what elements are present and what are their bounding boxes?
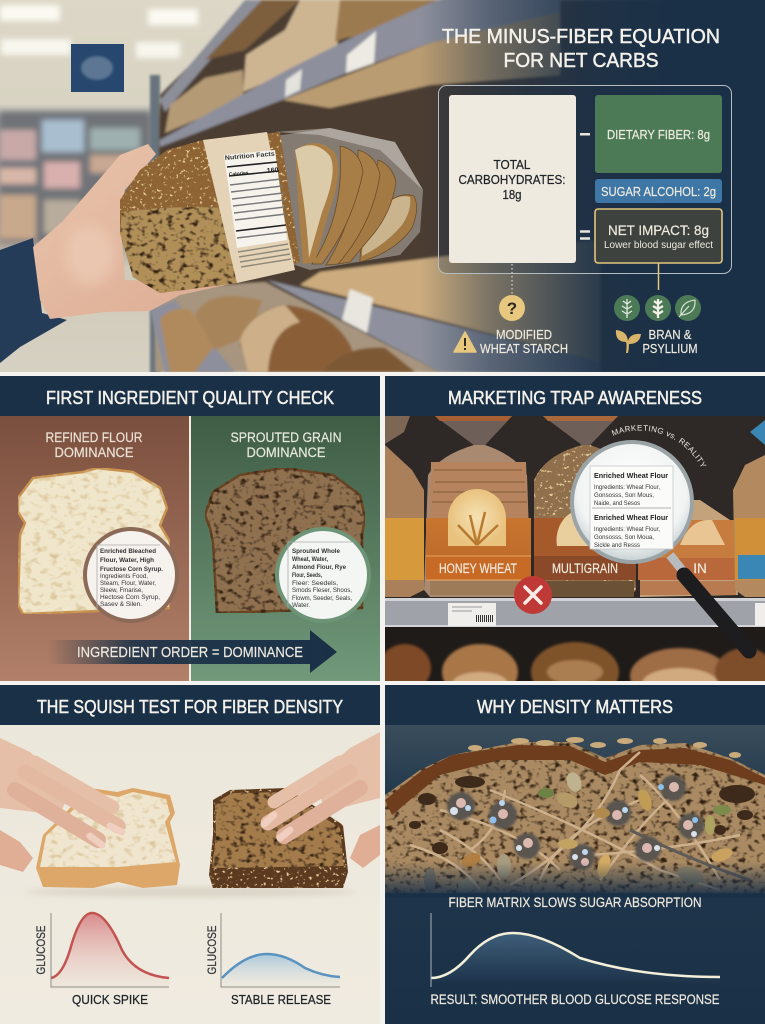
box: dietary fiber: [595, 95, 722, 173]
magnifying glass lens: Sickle and Resss: [594, 542, 640, 549]
chart: stable release: [207, 913, 340, 1007]
icon: sprout: [616, 330, 641, 353]
soft shadows: [25, 887, 355, 897]
bread cross-section: [385, 737, 765, 898]
magnifier: refined ingredients: Hectose Corn Syrup,: [100, 594, 160, 601]
magnifier: sprouted ingredients: Water.: [292, 602, 310, 609]
dark background: [385, 725, 765, 1024]
magnifying glass lens: Enriched Wheat Flour: [594, 513, 668, 522]
panel: net carbs hero: [0, 0, 765, 375]
hand holding loaf: [0, 144, 235, 363]
gold connector: [658, 263, 660, 290]
lower shelf wood: [300, 240, 600, 362]
icon: warning triangle: [454, 332, 476, 352]
magnifier: refined ingredients: Steam, Flour, Water,: [100, 580, 156, 587]
magnifying glass lens: Gonsosss, Son Moua,: [594, 534, 654, 541]
panel: squish test: [0, 685, 380, 1024]
icon: question mark: ?: [507, 299, 517, 318]
left partial bag: [385, 445, 424, 597]
panel: first ingredient quality check: [0, 376, 380, 681]
label: bran and psyllium: PSYLLIUM: [642, 341, 698, 356]
dotted connector: [511, 264, 513, 295]
box: net impact: [595, 209, 722, 263]
heading bar: FIRST INGREDIENT QUALITY CHECK: [46, 388, 334, 408]
bread wrap band: [203, 132, 295, 283]
equals sign: [580, 232, 590, 238]
magnifier: sprouted ingredients: Flowm, Seeder, Seals,: [292, 595, 352, 602]
box: total carbohydrates: CARBOHYDRATES:: [458, 172, 566, 187]
shelf rail: [385, 598, 765, 627]
icon: wheat: [645, 295, 671, 321]
heading bar: [385, 376, 765, 416]
icon: question mark: [499, 295, 525, 321]
upper shelf rail: [160, 0, 560, 147]
honey wheat bag: [424, 416, 531, 597]
lower shelf loaves: [379, 642, 765, 704]
subheading: sprouted grain: DOMINANCE: [246, 445, 326, 460]
magnifier: sprouted ingredients: [277, 529, 369, 621]
chart: smoother glucose curve: [431, 913, 720, 987]
icon: red x: [514, 576, 552, 614]
upper shelf wood: [283, 10, 560, 108]
hanging store sign: [71, 44, 124, 92]
box: sugar alcohol: [595, 179, 722, 203]
subheading: refined flour: [46, 430, 143, 460]
heading bar: [0, 376, 380, 416]
sprouted grain slice: [205, 468, 365, 613]
third bag: IN: [693, 561, 707, 576]
caption: fiber matrix: FIBER MATRIX SLOWS SUGAR ABSORPTION: [448, 895, 702, 910]
magnifier: sprouted ingredients: Wheat, Water,: [292, 556, 328, 563]
label: modified wheat starch: MODIFIED: [496, 327, 552, 342]
label: bran and psyllium: [643, 330, 697, 354]
magnifying glass lens: Ingredients: Wheat Flour,: [594, 526, 660, 533]
nutrition facts label: [224, 150, 291, 267]
loaf bag sheen: [275, 128, 423, 190]
label: modified wheat starch: WHEAT STARCH: [480, 341, 568, 356]
box: net impact: NET IMPACT: 8g: [608, 222, 709, 238]
nutrition facts label: Nutrition Facts: [225, 151, 275, 162]
magnifier: refined ingredients: Fructose Corn Syrup.: [100, 566, 163, 573]
heading bar: MARKETING TRAP AWARENESS: [448, 388, 702, 408]
right partial bag: [733, 455, 765, 597]
subheading: sprouted grain: SPROUTED GRAIN: [230, 430, 342, 445]
panel: marketing trap awareness: [385, 376, 765, 681]
shelving back: [154, 0, 640, 372]
loaf bag: [275, 128, 423, 270]
nutrition facts label: 160: [267, 167, 279, 175]
lower shelf rail: [267, 280, 600, 372]
magnifying glass handle: [670, 555, 749, 651]
price tags: [448, 603, 496, 626]
magnifying glass lens: Ingredients: Wheat Flour,: [594, 484, 660, 491]
nutrition facts label: Calories: [229, 170, 249, 178]
navy overlay gradient: [420, 0, 765, 372]
chart: quick spike: [36, 913, 169, 1007]
brown column: [0, 416, 189, 681]
magnifier: refined ingredients: Sasev & Silen.: [100, 601, 142, 608]
minus sign: [580, 133, 590, 136]
magnifier: refined ingredients: Enriched Bleached: [100, 548, 156, 555]
label: bran and psyllium: BRAN &: [648, 327, 692, 342]
magnifier: sprouted ingredients: Flour, Seeds,: [292, 572, 322, 579]
magnifier: refined ingredients: Sleew, Fmarise,: [100, 587, 143, 594]
magnifying glass lens: Gonsosss, Son Mous,: [594, 492, 654, 499]
subheading: refined flour: REFINED FLOUR: [46, 430, 143, 445]
box: total carbohydrates: 18g: [502, 187, 522, 202]
heading bar: [385, 685, 765, 725]
multigrain bag: MULTIGRAIN: [552, 561, 618, 576]
box: total carbohydrates: [449, 95, 576, 263]
box: net impact: Lower blood sugar effect: [604, 240, 713, 251]
divider: [189, 416, 191, 681]
glucose molecule clusters: [447, 775, 704, 870]
icon: bran grain: [614, 295, 640, 321]
arrow: ingredient order: [47, 630, 337, 673]
magnifying glass lens: Enriched Wheat Flour: [594, 471, 668, 480]
heading: minus-fiber equation: [442, 28, 719, 68]
magnifying glass lens: Naide, and Sesos: [594, 500, 640, 507]
shelf scene: [385, 416, 765, 681]
top seeds: [468, 737, 741, 758]
heading: minus-fiber equation: THE MINUS-FIBER EQUATION: [442, 25, 720, 48]
cream background: [0, 725, 380, 1024]
equation frame: [438, 86, 732, 274]
squished white bread: [36, 788, 180, 888]
chart: quick spike: GLUCOSE: [36, 925, 48, 974]
chart: stable release: STABLE RELEASE: [231, 992, 331, 1007]
magnifier: sprouted ingredients: Almond Flour, Rye: [292, 564, 346, 571]
magnifier: refined ingredients: Flour, Water, High: [100, 557, 154, 564]
grains and seeds: [424, 770, 734, 893]
magnifier: refined ingredients: Ingredients Food,: [100, 573, 148, 580]
panel: why density matters: [385, 685, 765, 1024]
store background photo: [0, 0, 648, 372]
green column: [191, 416, 380, 681]
fiber strands: [410, 752, 740, 890]
right hand: [264, 732, 380, 868]
label: modified wheat starch: [480, 330, 568, 354]
third bag: [638, 500, 738, 597]
subheading: refined flour: DOMINANCE: [54, 445, 134, 460]
sleeve: [0, 238, 67, 363]
magnifier: refined ingredients: [85, 529, 177, 621]
heading bar: THE SQUISH TEST FOR FIBER DENSITY: [37, 697, 343, 717]
top shelf breads: [160, 0, 262, 112]
left hand: [0, 738, 122, 872]
box: sugar alcohol: SUGAR ALCOHOL: 2g: [601, 185, 716, 199]
squished grain bread: [209, 788, 348, 888]
heading: minus-fiber equation: FOR NET CARBS: [504, 49, 658, 72]
honey wheat bag: HONEY WHEAT: [439, 561, 517, 576]
bottom fade: [385, 862, 765, 898]
chart: stable release: GLUCOSE: [207, 925, 219, 974]
multigrain bag: [534, 416, 636, 597]
chart: quick spike: QUICK SPIKE: [72, 992, 148, 1007]
bread loaf with slices in bag: [120, 128, 423, 293]
box: dietary fiber: DIETARY FIBER: 8g: [607, 128, 710, 142]
curved label: marketing vs reality: MARKETING vs. REALITY: [612, 425, 706, 466]
heading bar: [0, 685, 380, 725]
air pockets: [409, 776, 755, 854]
subheading: sprouted grain: [230, 430, 342, 460]
magnifier: sprouted ingredients: Sprouted Whole: [292, 548, 340, 555]
magnifier: sprouted ingredients: Fleer: Seedels,: [292, 580, 338, 587]
caption: result: RESULT: SMOOTHER BLOOD GLUCOSE RESPONSE: [430, 992, 720, 1007]
icon: psyllium leaf: [675, 295, 701, 321]
box: total carbohydrates: TOTAL: [494, 157, 530, 172]
slices: [360, 195, 417, 262]
white bread slice: [18, 468, 170, 614]
magnifying glass lens: [572, 442, 692, 562]
magnifier: sprouted ingredients: Smods Fleser, Shoos,: [292, 587, 352, 594]
heading bar: WHY DENSITY MATTERS: [477, 697, 673, 717]
lower shelf breads: [150, 296, 415, 372]
arrow: ingredient order: INGREDIENT ORDER = DOMINANCE: [77, 644, 303, 661]
loaf heel: [120, 132, 300, 293]
